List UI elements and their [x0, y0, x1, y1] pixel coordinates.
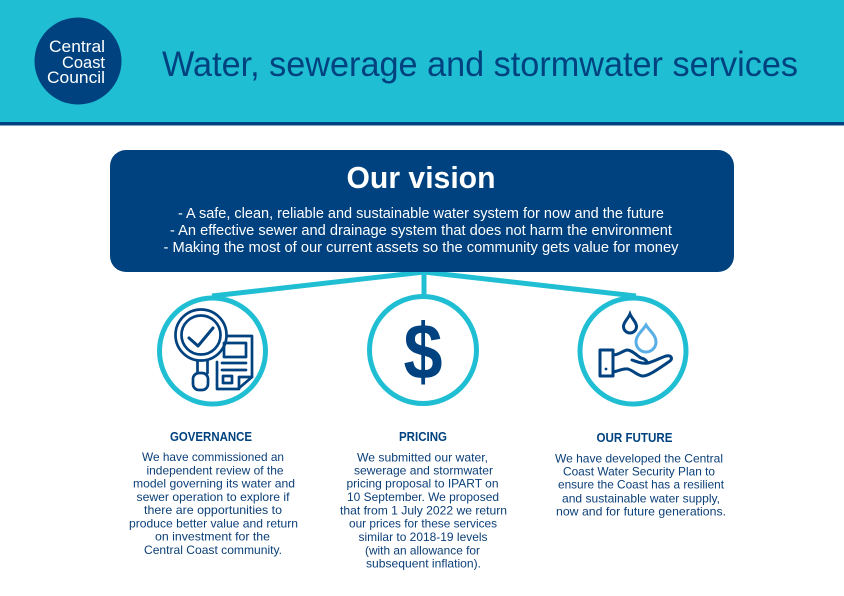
icon: water drops and hand: [580, 298, 686, 404]
text: pricing: [340, 452, 507, 571]
icon: governance magnifier and document: [160, 298, 266, 404]
vision text: - An effective sewer and drainage system that does not harm the environment: [170, 223, 672, 239]
icon: dollar sign: [370, 296, 476, 404]
panel: our vision: [110, 150, 734, 272]
text: our future: Coast Water Security Plan to: [563, 466, 715, 479]
text: governance: sewer operation to explore if: [136, 491, 290, 504]
text: pricing: sewerage and stormwater: [354, 464, 493, 477]
text: pricing: 10 September. We proposed: [347, 491, 499, 504]
text: governance: produce better value and return: [129, 517, 298, 530]
logo: Central Coast Council: Central: [49, 37, 105, 56]
logo: Central Coast Council: Coast: [62, 53, 105, 72]
text: pricing: subsequent inflation).: [366, 558, 481, 571]
text: pricing: We submitted our water,: [357, 452, 488, 465]
text: pricing: that from 1 July 2022 we return: [340, 504, 507, 517]
text: pricing: pricing proposal to IPART on: [346, 477, 498, 490]
heading: our future: OUR FUTURE: [596, 431, 672, 445]
text: our future: and sustainable water supply,: [562, 492, 720, 505]
text: our future: now and for future generations.: [556, 506, 726, 519]
icon: dollar sign: $: [404, 306, 442, 396]
title: Water, sewerage and stormwater services: [162, 45, 798, 84]
text: pricing: (with an allowance for: [365, 544, 480, 557]
text: governance: independent review of the: [146, 464, 284, 477]
connector lines: [212, 272, 636, 296]
text: governance: [129, 451, 298, 557]
logo: Central Coast Council: Council: [47, 68, 105, 87]
text: governance: there are opportunities to: [144, 504, 282, 517]
text: governance: Central Coast community.: [144, 544, 282, 557]
heading: pricing: PRICING: [399, 430, 447, 444]
text: governance: We have commissioned an: [142, 451, 284, 464]
vision text: - A safe, clean, reliable and sustainable water system for now and the future: [178, 206, 664, 222]
text: our future: [555, 452, 726, 519]
vision text: - Making the most of our current assets so the community gets value for money: [164, 240, 679, 256]
header banner: [0, 0, 844, 126]
text: pricing: our prices for these services: [349, 518, 497, 531]
text: our future: We have developed the Central: [555, 452, 723, 465]
text: governance: on investment for the: [155, 530, 270, 544]
text: pricing: similar to 2018-19 levels: [358, 531, 488, 544]
logo: Central Coast Council: [34, 18, 122, 104]
text: governance: model governing its water and: [133, 477, 295, 490]
vision text: [164, 206, 679, 256]
vision heading: Our vision: [346, 160, 496, 195]
heading: governance: GOVERNANCE: [170, 430, 252, 444]
text: our future: ensure the Coast has a resilient: [558, 479, 725, 492]
